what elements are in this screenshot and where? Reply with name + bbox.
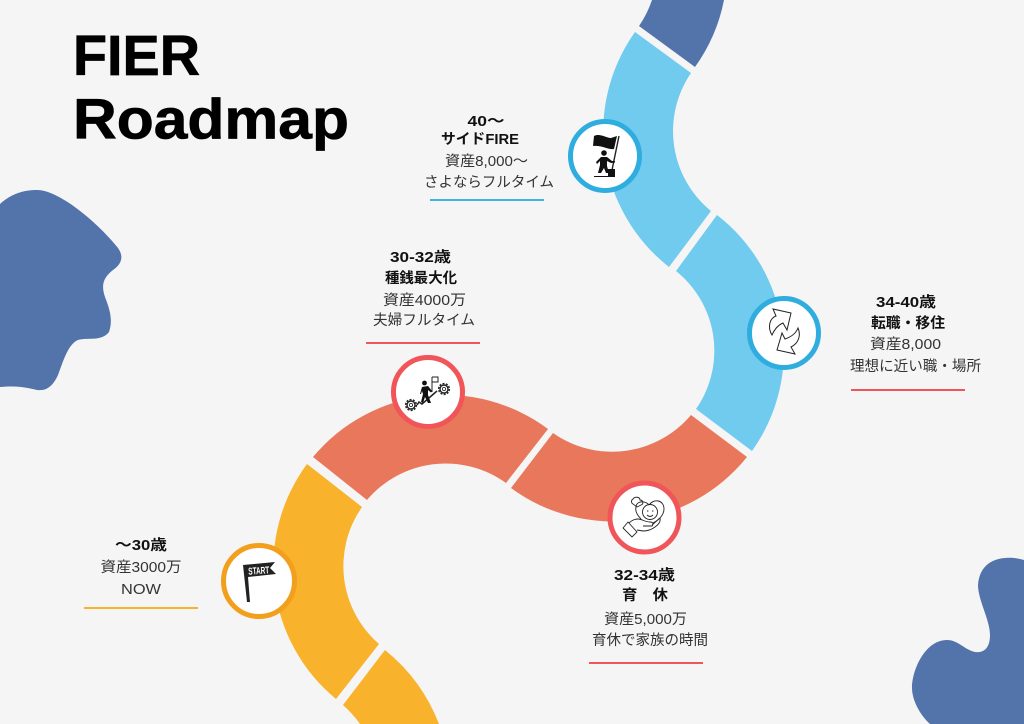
title: FIER	[73, 24, 200, 87]
label: up to age 30: 資産3000万	[100, 559, 182, 576]
road segment: red right	[511, 415, 747, 521]
milestone: summit flag icon	[570, 122, 640, 190]
milestone: swap arrows icon	[750, 298, 818, 368]
label: up to age 30	[84, 537, 198, 609]
milestone: start flag icon	[224, 546, 294, 616]
label: age 40 and up: 40〜	[468, 114, 504, 130]
label: age 34-40: 資産8,000	[870, 336, 941, 353]
road segment: light blue lower	[676, 215, 784, 451]
label: age 40 and up: サイドFIRE	[441, 131, 519, 148]
label: age 40 and up: 資産8,000〜	[445, 153, 528, 170]
label: age 32-34	[589, 567, 708, 664]
label: up to age 30: NOW	[121, 582, 161, 598]
label: age 30-32: 夫婦フルタイム	[373, 311, 475, 329]
label: age 30-32: 資産4000万	[383, 292, 466, 309]
title: Roadmap	[73, 88, 349, 150]
road segment: yellow upper	[273, 464, 379, 699]
label: age 34-40: 理想に近い職・場所	[850, 358, 981, 375]
milestone: climbing with gears icon	[394, 358, 462, 426]
label: age 32-34: 資産5,000万	[604, 611, 687, 628]
blob: left decoration	[0, 190, 121, 390]
road segment: dark blue top	[639, 0, 724, 67]
label: age 32-34: 32-34歳	[614, 567, 676, 584]
label: age 30-32: 30-32歳	[390, 249, 452, 266]
label: age 34-40: 34-40歳	[876, 294, 937, 311]
road segment: yellow lower	[343, 650, 439, 724]
title	[73, 24, 349, 150]
road segment: light blue upper	[603, 32, 711, 267]
blob: bottom-right decoration	[912, 558, 1024, 724]
milestone: baby in hand icon	[610, 483, 679, 552]
label: age 34-40	[850, 294, 981, 391]
label: age 40 and up: さよならフルタイム	[424, 174, 554, 191]
label: age 34-40: 転職・移住	[871, 314, 946, 332]
label: age 30-32	[366, 249, 480, 344]
label: age 32-34: 育 休	[622, 587, 669, 604]
milestone: start flag icon: START	[248, 565, 270, 578]
label: age 30-32: 種銭最大化	[385, 269, 457, 287]
road segment: red left	[313, 395, 548, 500]
label: age 32-34: 育休で家族の時間	[592, 632, 708, 649]
label: up to age 30: 〜30歳	[115, 537, 168, 554]
label: age 40 and up	[424, 114, 554, 201]
